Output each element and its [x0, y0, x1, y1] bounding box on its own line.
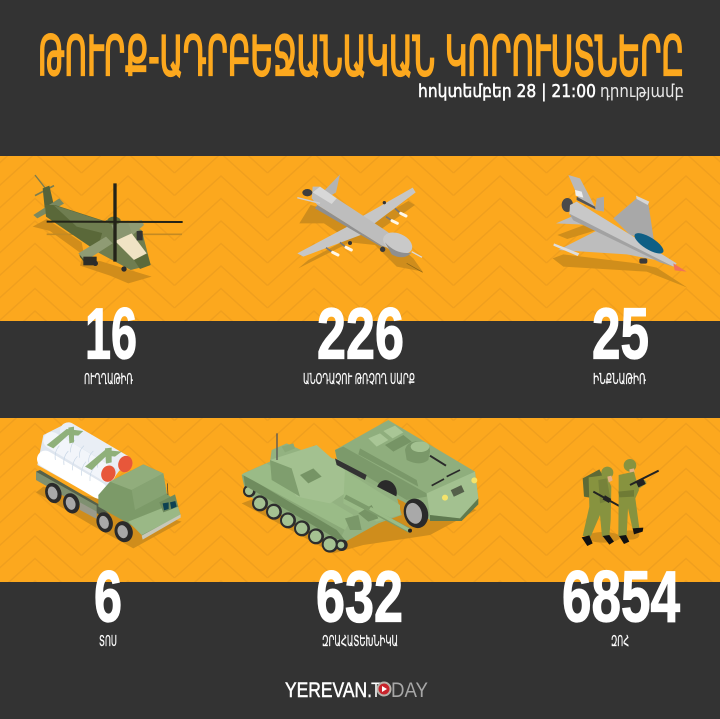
logo: Yerevan Today: YEREVAN. — [285, 678, 372, 702]
stat: TOS launchers — [94, 558, 122, 650]
stat: drones: ԱՆՕԴԱՉՈՒ ԹՌՉՈՂ ՍԱՐՔ — [303, 370, 415, 388]
stat: helicopters — [84, 294, 137, 388]
subtitle: դրությամբ — [600, 81, 684, 102]
subtitle: հոկտեմբեր 28 | 21:00 — [418, 81, 596, 102]
armoured vehicle — [335, 420, 478, 531]
icon: tank and armoured vehicle — [242, 420, 478, 553]
icon: helicopter — [33, 175, 183, 283]
icon: soldiers — [582, 459, 659, 546]
panel: bottom orange band — [0, 418, 720, 582]
left soldier — [582, 467, 625, 546]
icon: fighter jet — [553, 175, 687, 288]
icon: drone — [297, 174, 423, 272]
logo: Yerevan Today: T — [371, 678, 381, 702]
stat: helicopters: 16 — [85, 294, 137, 374]
panel: top orange band — [0, 156, 720, 321]
stat: casualties: 6854 — [562, 558, 680, 638]
stat: helicopters: ՈՒՂՂԱԹԻՌ — [84, 370, 133, 388]
stat: aircraft: ԻՆՔՆԱԹԻՌ — [593, 370, 646, 388]
stat: TOS launchers: 6 — [94, 558, 122, 638]
stat: drones — [303, 294, 415, 388]
stat: casualties: ԶՈՀ — [611, 632, 629, 650]
stat: aircraft — [592, 294, 649, 388]
stat: aircraft: 25 — [592, 294, 649, 374]
stat: armoured vehicles: 632 — [316, 558, 403, 638]
stat: armoured vehicles — [316, 558, 403, 650]
stat: TOS launchers: ՏՈՍ — [99, 632, 117, 650]
stat: drones: 226 — [317, 294, 404, 374]
stat: armoured vehicles: ԶՐԱՀԱՏԵԽՆԻԿԱ — [322, 632, 398, 650]
tank — [242, 433, 412, 553]
stat: casualties — [562, 558, 680, 650]
icon: missile launcher truck — [36, 422, 182, 548]
logo: Yerevan Today: DAY — [391, 678, 428, 702]
right soldier — [618, 459, 659, 544]
